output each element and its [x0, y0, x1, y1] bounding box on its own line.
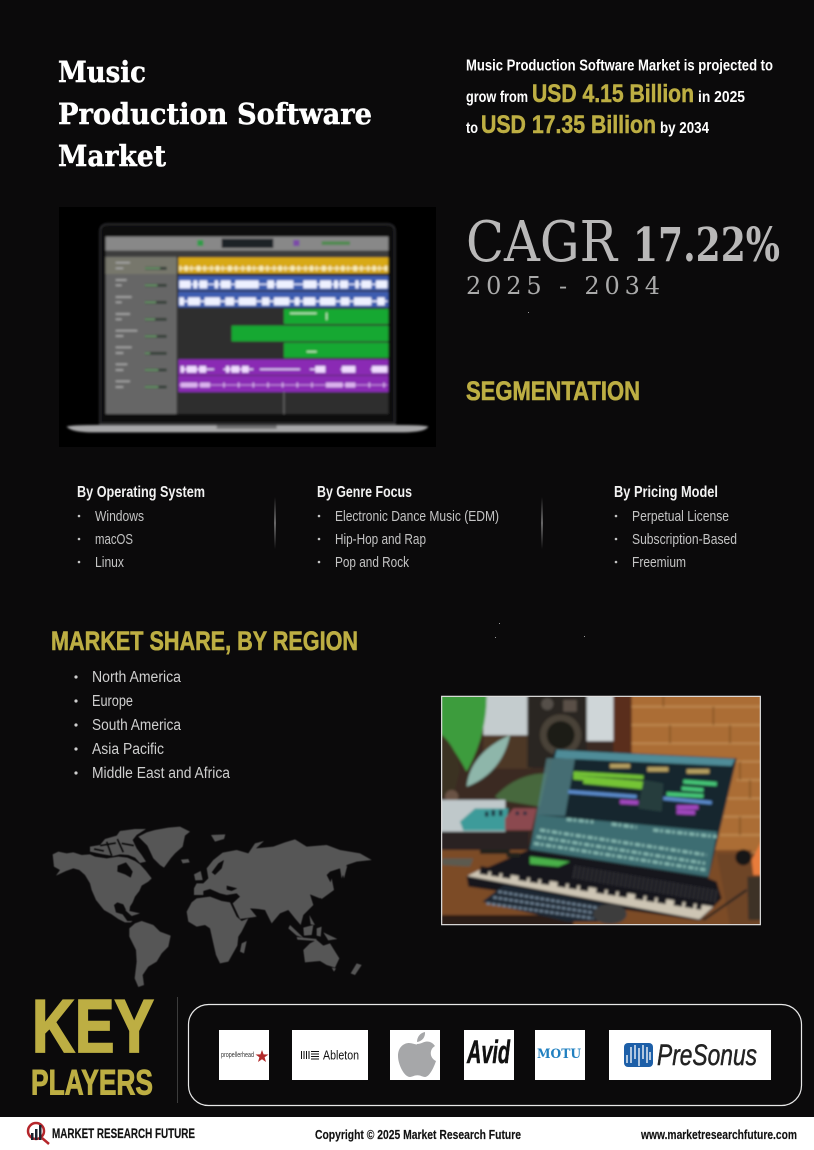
- world map: [53, 827, 372, 987]
- iceland: [181, 859, 190, 863]
- region list: Europe: [92, 693, 133, 710]
- svalbard: [211, 834, 225, 842]
- segment: by pricing model: By Pricing Model: [614, 484, 718, 501]
- segment: by pricing model: Perpetual License: [632, 509, 729, 525]
- caribbean: [125, 910, 140, 916]
- footer brand: MARKET RESEARCH FUTURE: [52, 1126, 195, 1141]
- CAGR value: [466, 210, 780, 300]
- segment: by pricing model: Freemium: [632, 555, 686, 571]
- heading: key players: [31, 984, 154, 1102]
- footer: [0, 1117, 814, 1150]
- market projection text: to: [466, 120, 478, 137]
- segment: by operating system: By Operating System: [77, 484, 205, 501]
- segment: by genre focus: [317, 484, 499, 571]
- title: Music: [58, 55, 146, 89]
- heading: key players: KEY: [32, 984, 154, 1068]
- logo: avid: Avid: [466, 1034, 511, 1070]
- region list: North America: [92, 669, 181, 686]
- title: Market: [58, 139, 167, 173]
- australia: [303, 940, 339, 972]
- madagascar: [240, 941, 247, 953]
- heading: market share by region: MARKET SHARE, BY REGION: [51, 626, 358, 656]
- segment: by genre focus: Hip-Hop and Rap: [335, 532, 426, 548]
- segment: by genre focus: By Genre Focus: [317, 484, 412, 501]
- heading: key players: PLAYERS: [31, 1064, 153, 1102]
- market projection text: USD 4.15 Billion: [532, 80, 694, 108]
- footer logo icon: [28, 1123, 49, 1144]
- segment: by pricing model: [614, 484, 737, 571]
- region list: [74, 669, 230, 782]
- CAGR value: 2025 - 2034: [466, 272, 660, 300]
- logo: presonus: PreSonus: [657, 1039, 757, 1072]
- heading: segmentation: SEGMENTATION: [466, 376, 640, 406]
- logo: avid: [464, 1030, 514, 1080]
- market projection text: in 2025: [698, 89, 745, 106]
- CAGR value: CAGR: [466, 210, 619, 275]
- greenland: [138, 827, 190, 868]
- arctic islands: [90, 829, 146, 863]
- segment: by genre focus: Pop and Rock: [335, 555, 410, 571]
- market projection text: USD 17.35 Billion: [481, 111, 656, 139]
- market projection text: by 2034: [660, 120, 709, 137]
- segment: by operating system: macOS: [95, 532, 133, 548]
- title: [58, 55, 372, 173]
- region list: Asia Pacific: [92, 741, 164, 758]
- market projection text: grow from: [466, 89, 528, 106]
- image: music studio desk: [440, 695, 762, 926]
- logo: motu: [535, 1030, 585, 1080]
- logo: ableton: [292, 1030, 368, 1080]
- south america: [129, 921, 171, 987]
- title: Production Software: [58, 97, 372, 131]
- region list: South America: [92, 717, 181, 734]
- eurasia: [194, 839, 372, 925]
- panel: key player logos: [188, 1004, 802, 1106]
- region list: Middle East and Africa: [92, 765, 230, 782]
- copyright: Copyright © 2025 Market Research Future: [315, 1127, 521, 1142]
- japan and sakhalin: [318, 866, 347, 899]
- segment: by pricing model: Subscription-Based: [632, 532, 737, 548]
- segment: by operating system: Windows: [95, 509, 144, 525]
- market projection text: [466, 58, 773, 139]
- logo: propellerhead: [219, 1030, 269, 1080]
- logo: motu: MOTU: [537, 1047, 582, 1062]
- image: laptop with music production software: [59, 207, 436, 447]
- logo: apple: [390, 1030, 440, 1080]
- new zealand: [351, 963, 362, 975]
- segment: by operating system: Linux: [95, 555, 125, 571]
- arctic channels: [94, 839, 134, 856]
- southeast asia islands: [288, 915, 337, 941]
- logo: presonus: [609, 1030, 771, 1080]
- africa: [187, 897, 248, 963]
- north america: [53, 852, 152, 922]
- logo: ableton: Ableton: [323, 1048, 359, 1062]
- segment: by operating system: [77, 484, 205, 571]
- logo: propellerhead: propellerhead: [221, 1052, 254, 1059]
- britain: [194, 871, 203, 880]
- segment: by genre focus: Electronic Dance Music (EDM): [335, 509, 499, 525]
